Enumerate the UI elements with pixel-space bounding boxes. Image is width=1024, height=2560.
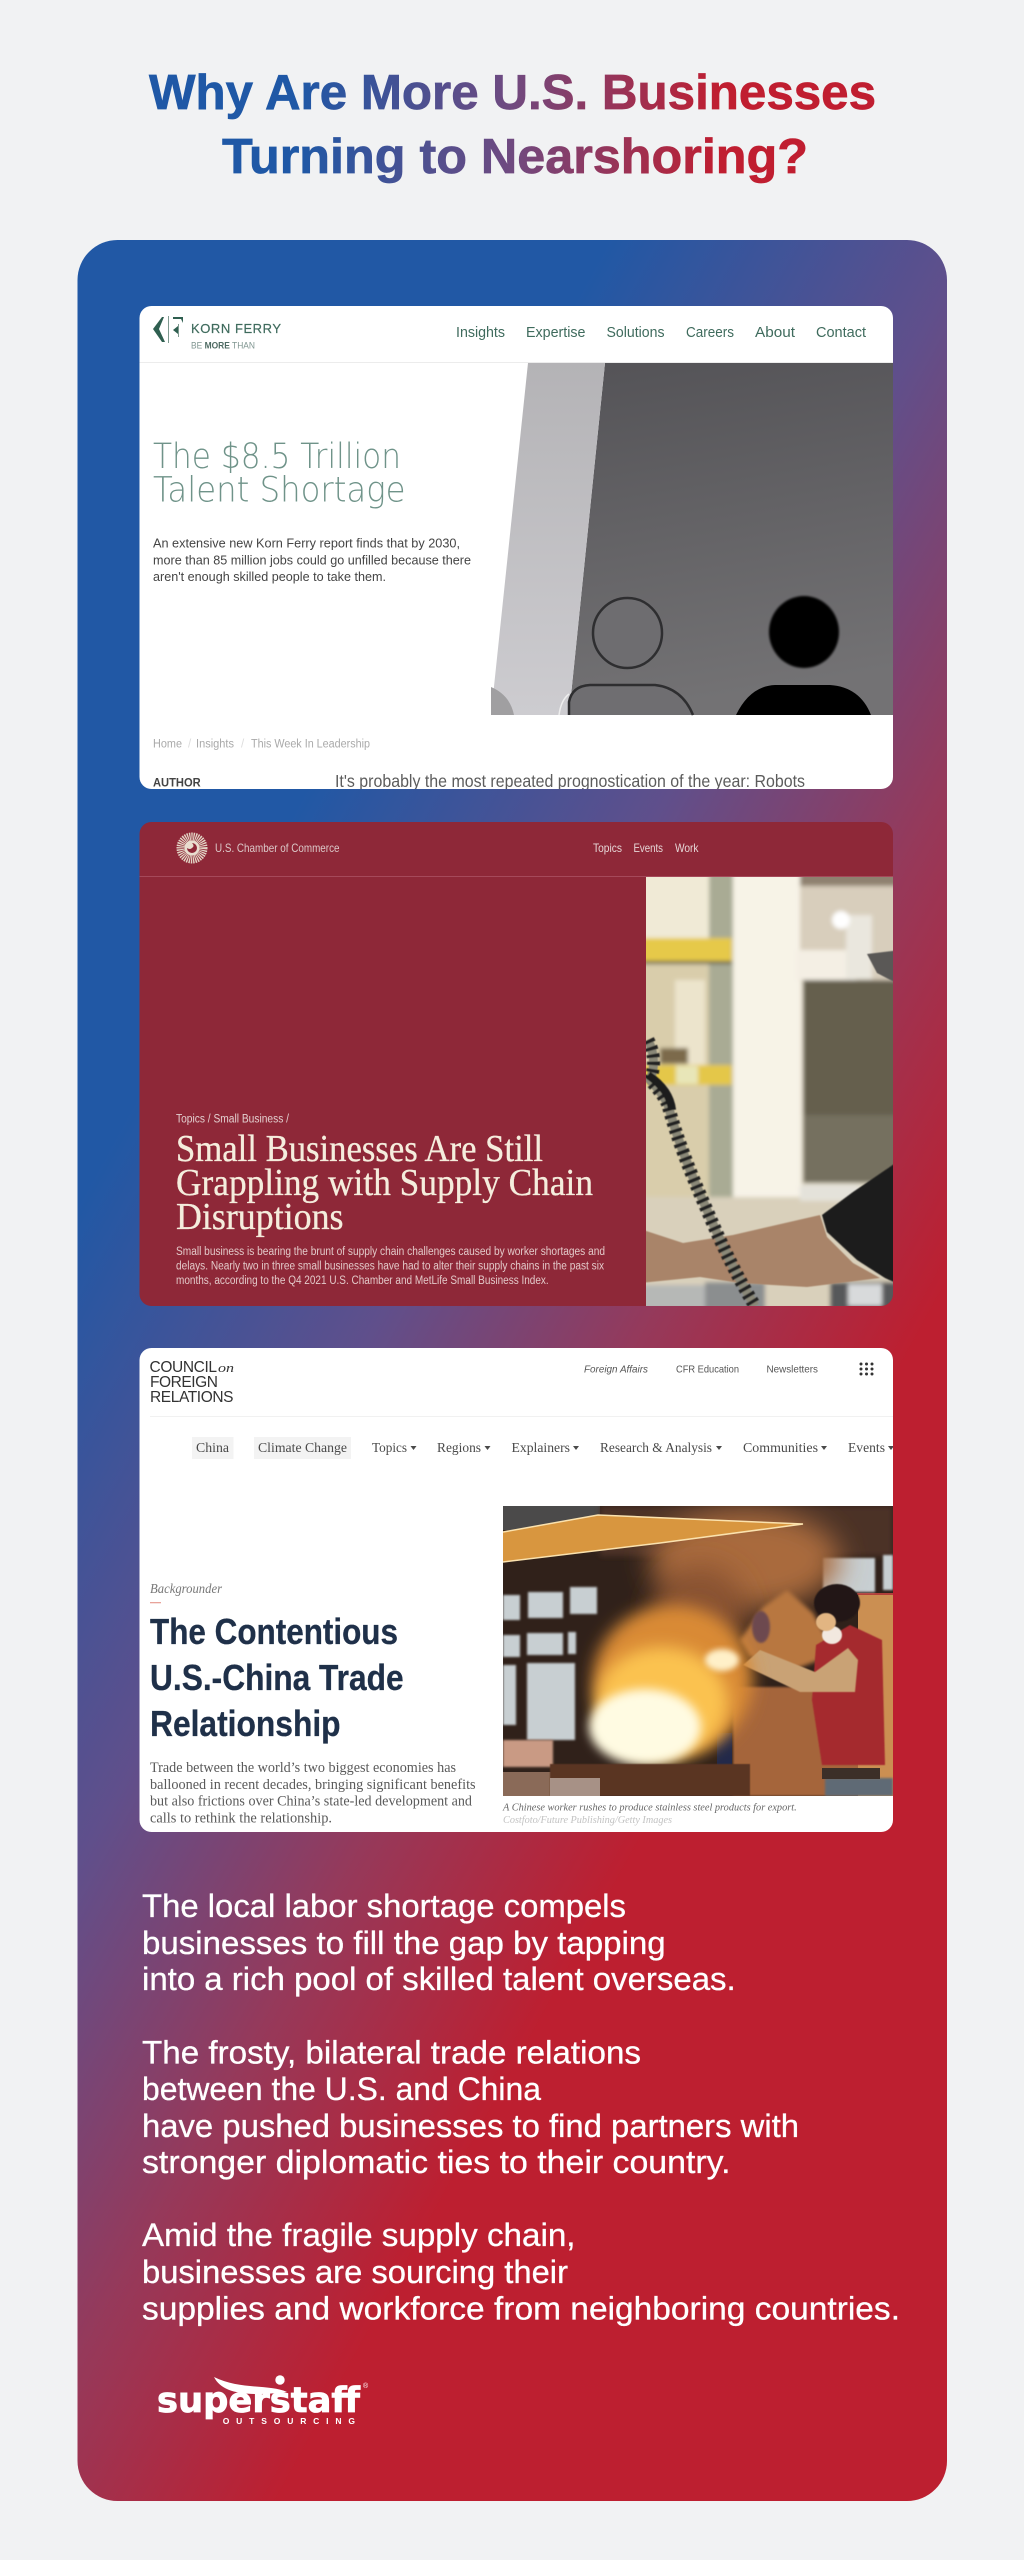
text block: supply chain summary: months, according to the Q4 2021 U.S. Chamber and MetLife Small Business Index. <box>176 1275 549 1287</box>
heading: The Contentious U.S.-China Trade Relationship: The Contentious <box>150 1611 398 1652</box>
breadcrumb: Home <box>153 739 182 751</box>
navigation: CFR main menu: Climate Change <box>258 1441 347 1456</box>
text block: report summary: more than 85 million jobs could go unfilled because there <box>153 552 471 567</box>
windows <box>503 1555 893 1740</box>
navigation: CFR main menu: China <box>196 1441 230 1456</box>
text block: labor shortage <box>142 1888 736 1997</box>
navigation: CFR top links <box>584 1365 818 1374</box>
text block: trade relations: The frosty, bilateral trade relations <box>142 2035 641 2071</box>
navigation: CFR main menu: Research & Analysis <box>600 1441 712 1456</box>
text block: trade relations: have pushed businesses to find partners with <box>142 2108 799 2144</box>
text block: author and article start <box>153 774 804 789</box>
text block: trade summary: ballooned in recent decades, bringing significant benefits <box>150 1777 476 1793</box>
heading: Small Businesses Are Still Grappling: Disruptions <box>176 1196 344 1238</box>
logo: Council on Foreign Relations: RELATIONS <box>150 1389 234 1406</box>
text block: supply chain: Amid the fragile supply chain, <box>142 2217 576 2253</box>
navigation: Korn Ferry: Contact <box>816 325 866 341</box>
text block: trade relations: stronger diplomatic ties to their country. <box>142 2144 730 2180</box>
heading: Small Businesses Are Still Grappling: Small Businesses Are Still <box>176 1128 543 1170</box>
title: Why Are More U.S. Businesses <box>149 66 876 120</box>
logo: SuperStaff Outsourcing: OUTSOURCING <box>223 2416 355 2426</box>
navigation: CFR top links: CFR Education <box>676 1364 739 1376</box>
logo: Korn Ferry: KORN FERRY <box>191 321 281 336</box>
text block: trade relations <box>142 2035 799 2180</box>
heading: Small Businesses Are Still Grappling: Grappling with Supply Chain <box>176 1162 593 1204</box>
text block: labor shortage: The local labor shortage compels <box>142 1888 626 1924</box>
logo: SuperStaff Outsourcing: superstaff <box>157 2381 361 2421</box>
navigation: Chamber <box>593 844 698 854</box>
logo: Korn Ferry: BE MORE THAN <box>191 341 255 351</box>
text block: report summary: aren't enough skilled people to take them. <box>153 569 386 584</box>
flame <box>593 1605 753 1755</box>
navigation: Chamber: Topics <box>593 841 622 855</box>
text block: supply chain summary <box>176 1246 605 1287</box>
panel: gradient background <box>78 240 947 2501</box>
heading: The $8.5 Trillion Talent Shortage <box>153 437 406 511</box>
navigation: Chamber: Work <box>675 841 699 855</box>
furnace <box>503 1740 553 1767</box>
text block: supply chain <box>142 2217 900 2327</box>
logo: Council on Foreign Relations: FOREIGN <box>150 1374 218 1391</box>
breadcrumb: / <box>188 739 192 751</box>
navigation: CFR main menu: Regions <box>437 1441 481 1456</box>
title <box>149 66 876 184</box>
navigation: Chamber: Events <box>634 841 663 855</box>
navigation: Korn Ferry: Careers <box>686 325 734 341</box>
panel: Korn Ferry screenshot <box>140 306 893 791</box>
navigation: CFR main menu: Explainers <box>512 1441 570 1456</box>
text block: trade summary: Trade between the world’s two biggest economies has <box>150 1760 456 1776</box>
photo caption <box>502 1802 797 1826</box>
icon: grid menu <box>860 1362 874 1376</box>
navigation: Korn Ferry <box>457 326 866 340</box>
text block: report summary <box>153 536 471 584</box>
text block: trade summary <box>150 1760 476 1826</box>
navigation: CFR top links: Newsletters <box>766 1364 818 1376</box>
text block: trade summary: calls to rethink the relationship. <box>150 1810 332 1826</box>
heading: The Contentious U.S.-China Trade Relationship <box>150 1611 404 1744</box>
navigation: CFR main menu: Communities <box>743 1441 818 1456</box>
panel: U.S. Chamber of Commerce screenshot <box>140 822 900 1310</box>
logo: Council on Foreign Relations <box>150 1361 234 1402</box>
text block: report summary: An extensive new Korn Ferry report finds that by 2030, <box>153 536 460 551</box>
heading: Small Businesses Are Still Grappling <box>176 1128 593 1238</box>
text block: supply chain summary: Small business is bearing the brunt of supply chain challenges caused by worker shortages and <box>176 1246 605 1258</box>
navigation: Korn Ferry: Solutions <box>606 325 664 341</box>
navigation: Korn Ferry: Insights <box>456 325 505 341</box>
hood <box>503 1515 803 1562</box>
heading: The $8.5 Trillion Talent Shortage: The $8.5 Trillion <box>153 437 401 477</box>
breadcrumb: This Week In Leadership <box>251 739 370 751</box>
text block: trade relations: between the U.S. and China <box>142 2071 542 2107</box>
smoke <box>650 1510 840 1610</box>
panel: Council on Foreign Relations screenshot <box>140 1348 894 1832</box>
title: Turning to Nearshoring? <box>222 130 808 184</box>
navigation: CFR main menu: Topics <box>372 1441 407 1456</box>
sack and worker <box>740 1590 830 1670</box>
navigation: CFR top links: Foreign Affairs <box>584 1364 649 1376</box>
heading: The Contentious U.S.-China Trade Relationship: U.S.-China Trade <box>150 1657 404 1698</box>
text block: author and article start: AUTHOR <box>153 776 201 790</box>
text: breadcrumb topics: Topics / Small Business / <box>176 1114 290 1126</box>
breadcrumb: / <box>241 739 245 751</box>
hero image: talent silhouettes <box>491 363 893 715</box>
label: Backgrounder <box>150 1582 222 1603</box>
text block: labor shortage: businesses to fill the gap by tapping <box>142 1925 666 1961</box>
logo: SuperStaff Outsourcing: ® <box>363 2382 369 2390</box>
photo: worker and furnace flame <box>503 1506 894 1796</box>
logo: Korn Ferry <box>153 316 281 351</box>
text block: supply chain: businesses are sourcing their <box>142 2254 568 2290</box>
heading: The $8.5 Trillion Talent Shortage: Talent Shortage <box>153 471 406 511</box>
breadcrumb <box>153 739 370 751</box>
navigation: Korn Ferry: About <box>755 325 795 341</box>
logo: Chamber of Commerce <box>182 838 340 858</box>
logo: Council on Foreign Relations: COUNCIL <box>150 1359 217 1376</box>
text block: author and article start: It's probably the most repeated prognostication of the year: Robots <box>335 771 805 791</box>
breadcrumb: Insights <box>196 739 234 751</box>
photo: worker with phone cord <box>640 870 900 1310</box>
text block: supply chain summary: delays. Nearly two in three small businesses have had to alter their supply chains in the past six <box>176 1261 604 1273</box>
logo: Chamber of Commerce: U.S. Chamber of Commerce <box>215 841 340 855</box>
photo caption: Costfoto/Future Publishing/Getty Images <box>503 1814 672 1826</box>
heading: The Contentious U.S.-China Trade Relationship: Relationship <box>150 1703 341 1744</box>
navigation: CFR main menu: Events <box>848 1441 885 1456</box>
logo: Council on Foreign Relations: on <box>218 1360 234 1375</box>
label: Backgrounder: Backgrounder <box>150 1582 222 1597</box>
text block: labor shortage: into a rich pool of skilled talent overseas. <box>142 1961 736 1997</box>
photo caption: A Chinese worker rushes to produce stainless steel products for export. <box>502 1802 797 1814</box>
navigation: CFR main menu <box>192 1437 894 1459</box>
navigation: Korn Ferry: Expertise <box>526 325 586 341</box>
text block: trade summary: but also frictions over China’s state-led development and <box>150 1794 473 1810</box>
text block: supply chain: supplies and workforce from neighboring countries. <box>142 2291 900 2327</box>
